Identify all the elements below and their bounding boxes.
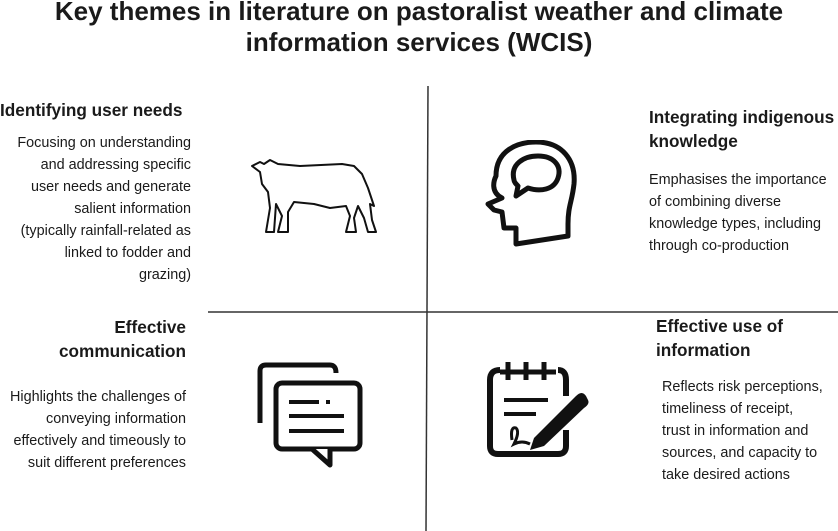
body text: sources, and capacity to [662,445,817,461]
heading [59,317,186,361]
body text: linked to fodder and [65,245,191,261]
panel: integrating indigenous knowledge [649,107,834,254]
body text [17,135,191,283]
body text: (typically rainfall-related as [21,223,191,239]
body text: grazing) [139,267,191,283]
body text: conveying information [46,411,186,427]
heading: communication [59,341,186,361]
icon: cow [251,159,377,233]
heading: Effective use of [656,316,783,336]
body text: of combining diverse [649,194,781,210]
body text: suit different preferences [28,455,186,471]
body text: through co-production [649,238,789,254]
panel: effective use of information [656,316,823,483]
heading [656,316,783,360]
body text [662,379,823,483]
heading: Identifying user needs [0,100,182,120]
body text: Reflects risk perceptions, [662,379,823,395]
body text: Emphasises the importance [649,172,827,188]
heading: knowledge [649,131,738,151]
heading: information [656,340,751,360]
panel: effective communication [10,317,186,471]
body text: take desired actions [662,467,790,483]
icon: chat bubbles [258,362,362,468]
title: information services (WCIS) [246,27,592,57]
body text [10,389,186,471]
body text: Highlights the challenges of [10,389,186,405]
body text: user needs and generate [31,179,191,195]
body text: effectively and timeously to [13,433,186,449]
body text: salient information [74,201,191,217]
body text: Focusing on understanding [17,135,191,151]
body text: and addressing specific [41,157,191,173]
heading: Effective [114,317,186,337]
heading: Integrating indigenous [649,107,834,127]
heading [649,107,834,151]
body text: timeliness of receipt, [662,401,793,417]
body text [649,172,827,254]
icon: notepad with pencil [487,362,588,457]
body text: trust in information and [662,423,808,439]
body text: knowledge types, including [649,216,821,232]
title [55,0,783,57]
panel: identifying user needs [0,100,191,283]
icon: head with speech bubble [486,140,577,246]
